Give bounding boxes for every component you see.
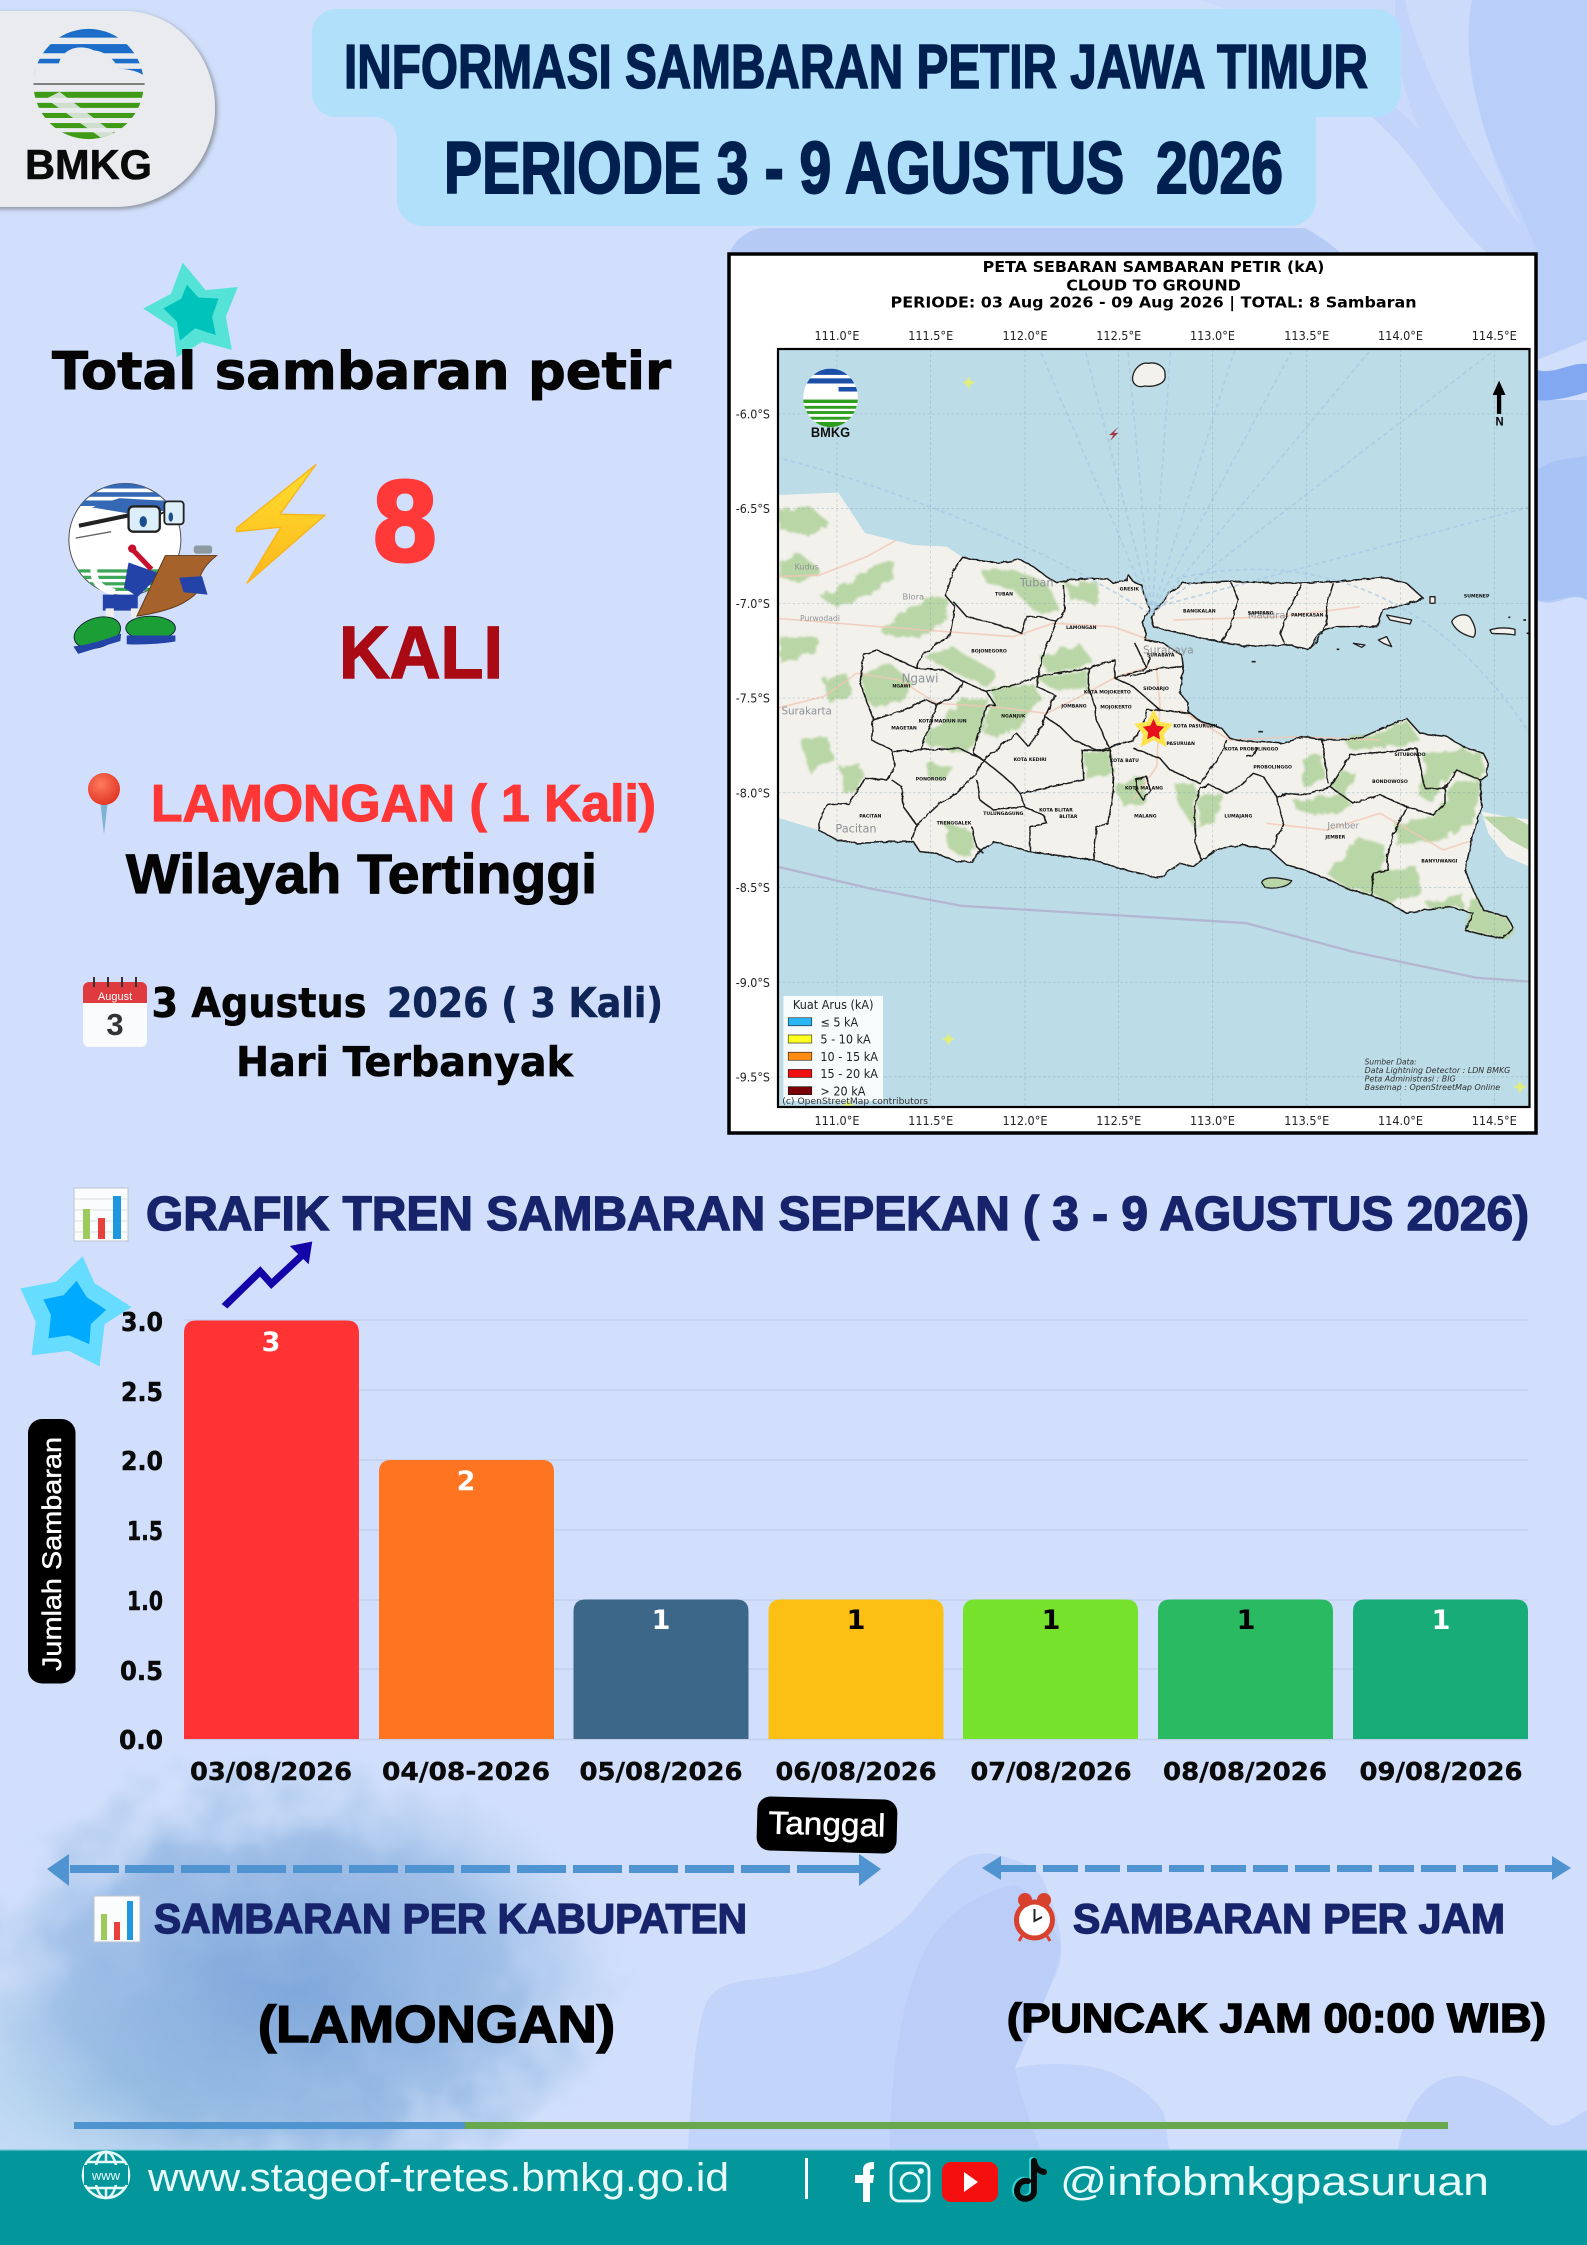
map title and axis labels: 111.0°E bbox=[814, 329, 859, 343]
regency labels: SITUBONDO bbox=[1394, 752, 1426, 758]
y axis tick labels: 2.5 bbox=[121, 1378, 163, 1408]
background place labels bbox=[781, 562, 1360, 836]
y axis tick labels bbox=[119, 1308, 163, 1756]
background place labels: Kudus bbox=[795, 562, 819, 571]
background place labels: Ngawi bbox=[901, 672, 939, 686]
top regency value: (LAMONGAN) bbox=[258, 1996, 615, 2054]
icon: mini BMKG logo bbox=[803, 368, 858, 437]
KALI label: KALI bbox=[339, 611, 503, 694]
bar: 05/08/2026 bbox=[574, 1600, 748, 1739]
regency labels: SIDOARJO bbox=[1143, 686, 1169, 692]
regency labels: SAMPANG bbox=[1248, 610, 1274, 616]
x axis date labels: 09/08/2026 bbox=[1360, 1757, 1522, 1786]
map title and axis labels: -9.0°S bbox=[736, 975, 770, 990]
heading: strikes per hour: SAMBARAN PER JAM bbox=[1073, 1895, 1505, 1942]
data source note bbox=[1365, 1057, 1510, 1092]
regency labels: PONOROGO bbox=[916, 777, 946, 783]
regency labels: PASURUAN bbox=[1166, 741, 1195, 747]
map title and axis labels: 113.5°E bbox=[1284, 329, 1329, 343]
bar value labels: 1 bbox=[1237, 1605, 1255, 1636]
map title and axis labels: PERIODE: 03 Aug 2026 - 09 Aug 2026 | TOTAL: 8 Sambaran bbox=[891, 293, 1417, 313]
regency labels: TRENGGALEK bbox=[937, 820, 972, 826]
peak day value: 2026 ( 3 Kali) bbox=[387, 979, 663, 1027]
map title and axis labels: -6.5°S bbox=[736, 502, 770, 516]
title banner bbox=[312, 9, 1401, 226]
icon: rising trend arrow bbox=[224, 1242, 312, 1306]
legend: Kuat Arus (kA) bbox=[793, 998, 874, 1012]
website URL: www.stageof-tretes.bmkg.go.id bbox=[147, 2156, 729, 2200]
y axis tick labels: 1.0 bbox=[127, 1587, 163, 1617]
x axis date labels: 08/08/2026 bbox=[1163, 1757, 1327, 1786]
legend: 10 - 15 kA bbox=[820, 1049, 878, 1064]
map title and axis labels: 111.5°E bbox=[908, 329, 953, 343]
map title and axis labels: -7.0°S bbox=[736, 597, 770, 611]
regency labels: BANGKALAN bbox=[1183, 608, 1216, 614]
map title and axis labels: -8.5°S bbox=[736, 881, 770, 895]
bar value labels: 1 bbox=[652, 1605, 670, 1636]
map title and axis labels: -8.0°S bbox=[736, 786, 770, 800]
footer accent line bbox=[74, 2122, 1448, 2129]
watercolour background: bottom centre shapes bbox=[688, 1853, 1587, 2149]
map title and axis labels: 113.0°E bbox=[1190, 329, 1235, 343]
icon: lightning marker bbox=[1109, 427, 1118, 441]
data source note: Peta Administrasi : BIG bbox=[1365, 1074, 1456, 1084]
map basemap bbox=[777, 349, 1533, 1109]
maritime boundary line bbox=[778, 867, 1530, 982]
legend bbox=[783, 996, 883, 1101]
regency labels: GRESIK bbox=[1120, 586, 1139, 592]
regency labels: JOMBANG bbox=[1060, 704, 1087, 710]
background place labels: Purwodadi bbox=[800, 614, 840, 623]
icon: calendar bbox=[83, 977, 147, 1047]
bar value labels: 1 bbox=[847, 1605, 865, 1636]
icon: www globe bbox=[83, 2152, 129, 2198]
peak day caption: Hari Terbanyak bbox=[236, 1038, 575, 1086]
x axis date labels: 05/08/2026 bbox=[580, 1757, 742, 1786]
map title and axis labels: -7.5°S bbox=[736, 691, 770, 706]
map title and axis labels: 111.5°E bbox=[908, 1114, 953, 1128]
icon: BMKG mascot with clipboard bbox=[69, 483, 217, 654]
regency labels: LAMONGAN bbox=[1066, 625, 1097, 631]
regency labels: LUMAJANG bbox=[1224, 813, 1252, 819]
overlay elements in figure coordinates bbox=[778, 349, 1530, 1109]
panel: lightning distribution map bbox=[729, 254, 1536, 1133]
icon: instagram bbox=[891, 2163, 929, 2201]
regency labels: PROBOLINGGO bbox=[1253, 764, 1292, 770]
regency labels: TULUNGAGUNG bbox=[983, 811, 1024, 817]
icon: BMKG emblem bbox=[34, 28, 145, 140]
regency labels: KOTA KEDIRI bbox=[1013, 757, 1047, 763]
regency labels: KOTA BATU bbox=[1110, 758, 1139, 764]
y axis title pill bbox=[28, 1419, 76, 1684]
regency labels: SUMENEP bbox=[1464, 594, 1490, 600]
map title and axis labels: CLOUD TO GROUND bbox=[1066, 276, 1241, 295]
bar: 07/08/2026 bbox=[963, 1600, 1138, 1739]
regency labels: BONDOWOSO bbox=[1372, 779, 1408, 785]
regency labels: BLITAR bbox=[1059, 814, 1078, 820]
bar value labels: 1 bbox=[1432, 1605, 1450, 1636]
footer band bbox=[0, 2149, 1587, 2245]
heading: total sambaran petir: Total sambaran petir bbox=[52, 342, 671, 402]
bar: 08/08/2026 bbox=[1158, 1600, 1333, 1739]
x axis date labels: 04/08-2026 bbox=[382, 1757, 550, 1786]
x axis title pill bbox=[756, 1796, 898, 1854]
map title and axis labels: 114.0°E bbox=[1378, 1114, 1423, 1128]
data source note: Sumber Data: bbox=[1365, 1057, 1417, 1066]
big number total: 8 bbox=[370, 459, 440, 587]
map title and axis labels: 112.0°E bbox=[1002, 329, 1047, 343]
y axis tick labels: 3.0 bbox=[121, 1308, 163, 1338]
map title and axis labels: 114.5°E bbox=[1472, 1114, 1517, 1128]
roads bbox=[777, 540, 1473, 850]
icon: calendar: 3 bbox=[106, 1007, 124, 1042]
arrow: left double dashed bbox=[47, 1854, 881, 1886]
icon: facebook bbox=[855, 2162, 874, 2202]
x axis title pill: Tanggal bbox=[768, 1804, 886, 1844]
highest region value: LAMONGAN ( 1 Kali) bbox=[151, 775, 656, 833]
icon: north arrow: N bbox=[1496, 415, 1504, 429]
watercolour background: top right bbox=[730, 0, 1587, 603]
regency labels: NGANJUK bbox=[1001, 714, 1026, 720]
icon: mini BMKG logo: BMKG bbox=[811, 424, 850, 440]
y axis title pill: Jumlah Sambaran bbox=[37, 1437, 67, 1671]
strike markers bbox=[842, 377, 1526, 1109]
regency labels: TUBAN bbox=[995, 591, 1013, 597]
icon: www globe: www bbox=[91, 2168, 121, 2183]
regency labels: PAMEKASAN bbox=[1291, 613, 1324, 619]
regency labels: KOTA MALANG bbox=[1125, 786, 1163, 792]
heading: strikes per regency: SAMBARAN PER KABUPATEN bbox=[154, 1895, 747, 1942]
map title and axis labels bbox=[736, 258, 1517, 1128]
panel: BMKG logo bbox=[0, 11, 215, 207]
shipping routes bbox=[780, 349, 1530, 734]
logo wordmark: BMKG bbox=[25, 141, 152, 188]
land bbox=[777, 493, 1513, 938]
background place labels: Tuban bbox=[1019, 576, 1054, 590]
province outline bbox=[818, 557, 1513, 938]
icon: north arrow bbox=[1493, 381, 1506, 429]
y axis tick labels: 2.0 bbox=[121, 1447, 163, 1477]
bar: 06/08/2026 bbox=[768, 1600, 944, 1739]
regency labels: BANYUWANGI bbox=[1421, 859, 1458, 865]
bar chart: daily strikes bbox=[119, 1308, 1528, 1786]
regency labels bbox=[859, 586, 1490, 865]
bar value labels: 1 bbox=[1042, 1605, 1060, 1636]
map title and axis labels: -6.0°S bbox=[736, 407, 770, 422]
regency labels: KOTA MADIUN IUN bbox=[919, 719, 967, 725]
map title and axis labels: PETA SEBARAN SAMBARAN PETIR (kA) bbox=[983, 258, 1324, 276]
x axis date labels: 07/08/2026 bbox=[970, 1757, 1132, 1786]
icon: alarm clock bbox=[1016, 1893, 1052, 1941]
regency labels: MALANG bbox=[1134, 813, 1157, 819]
map title and axis labels: 113.5°E bbox=[1284, 1114, 1329, 1128]
icon: chart emoji bbox=[74, 1188, 128, 1241]
icon: youtube bbox=[942, 2162, 998, 2202]
icon: chart emoji small bbox=[94, 1896, 140, 1942]
legend: 5 - 10 kA bbox=[820, 1032, 871, 1047]
y axis tick labels: 0.0 bbox=[119, 1726, 163, 1756]
map title and axis labels: 112.5°E bbox=[1096, 1114, 1141, 1128]
background place labels: Surakarta bbox=[781, 706, 832, 718]
regency labels: KOTA BLITAR bbox=[1039, 808, 1073, 814]
grid lines bbox=[778, 349, 1530, 1107]
icon: lightning bolt bbox=[236, 465, 325, 583]
background place labels: Pacitan bbox=[835, 822, 877, 836]
bar value labels: 3 bbox=[262, 1327, 280, 1358]
peak day value: 3 Agustus bbox=[152, 979, 366, 1027]
background place labels: Madura bbox=[1248, 610, 1285, 621]
map title and axis labels: 111.0°E bbox=[814, 1114, 859, 1128]
chart gridlines bbox=[184, 1320, 1528, 1740]
map title and axis labels: 114.5°E bbox=[1472, 329, 1517, 343]
background place labels: Surabaya bbox=[1143, 643, 1194, 656]
icon: map pin bbox=[88, 773, 120, 834]
basemap attribution: (c) OpenStreetMap contributors bbox=[782, 1096, 928, 1106]
map title and axis labels: -9.5°S bbox=[736, 1070, 770, 1085]
y axis tick labels: 1.5 bbox=[127, 1517, 163, 1547]
background place labels: Jember bbox=[1326, 822, 1360, 832]
x axis date labels: 06/08/2026 bbox=[776, 1757, 936, 1786]
bar: 03/08/2026 bbox=[184, 1320, 359, 1739]
legend: 15 - 20 kA bbox=[820, 1067, 878, 1081]
legend: > 20 kA bbox=[820, 1084, 865, 1098]
icon: teal star bbox=[143, 263, 238, 357]
icon: calendar: August bbox=[98, 991, 132, 1003]
regency labels: MAGETAN bbox=[891, 726, 917, 732]
regency labels: PACITAN bbox=[859, 814, 881, 820]
bar: 09/08/2026 bbox=[1353, 1600, 1528, 1739]
x axis date labels: 03/08/2026 bbox=[190, 1757, 352, 1786]
map title and axis labels: 112.0°E bbox=[1002, 1114, 1047, 1128]
bar value labels bbox=[262, 1327, 1450, 1636]
heading line 2: PERIODE 3 - 9 AGUSTUS 2026 bbox=[444, 128, 1283, 209]
regency labels: BOJONEGORO bbox=[971, 649, 1007, 655]
icon: blue star bbox=[20, 1256, 132, 1367]
bar value labels: 2 bbox=[457, 1466, 475, 1497]
icon: epicentre star bbox=[1137, 713, 1170, 744]
arrow: right double dashed bbox=[982, 1856, 1571, 1880]
map title and axis labels: 113.0°E bbox=[1190, 1114, 1235, 1128]
watercolour background: bottom left wash bbox=[0, 1760, 630, 2220]
footer separator bbox=[805, 2158, 808, 2199]
regency labels: JEMBER bbox=[1324, 834, 1346, 840]
forest areas bbox=[777, 507, 1513, 938]
map frame bbox=[778, 349, 1530, 1107]
heading: weekly trend chart: GRAFIK TREN SAMBARAN SEPEKAN ( 3 - 9 AGUSTUS 2026) bbox=[146, 1188, 1529, 1241]
regency labels: KOTA MOJOKERTO bbox=[1084, 690, 1131, 696]
social handle: @infobmkgpasuruan bbox=[1060, 2160, 1489, 2204]
islands bbox=[1133, 363, 1515, 888]
data source note: Basemap : OpenStreetMap Online bbox=[1365, 1083, 1500, 1092]
regency labels: KOTA PASURUAN bbox=[1173, 723, 1217, 729]
highest region caption: Wilayah Tertinggi bbox=[126, 842, 597, 905]
bar: 04/08-2026 bbox=[379, 1460, 554, 1739]
x axis date labels bbox=[190, 1757, 1522, 1786]
background place labels: Blora bbox=[903, 591, 924, 601]
peak day value bbox=[152, 979, 663, 1027]
y axis tick labels: 0.5 bbox=[120, 1657, 163, 1687]
regency labels: KOTA PROBOLINGGO bbox=[1224, 747, 1278, 753]
data source note: Data Lightning Detector : LDN BMKG bbox=[1365, 1066, 1510, 1075]
regency labels: NGAWI bbox=[892, 683, 911, 689]
map title and axis labels: 112.5°E bbox=[1096, 329, 1141, 343]
map title and axis labels: 114.0°E bbox=[1378, 329, 1423, 343]
regency labels: MOJOKERTO bbox=[1100, 704, 1132, 710]
icon: tiktok bbox=[1015, 2160, 1044, 2199]
regency labels: SURABAYA bbox=[1147, 652, 1175, 658]
peak hour value: (PUNCAK JAM 00:00 WIB) bbox=[1007, 1995, 1546, 2041]
legend: ≤ 5 kA bbox=[820, 1015, 858, 1029]
